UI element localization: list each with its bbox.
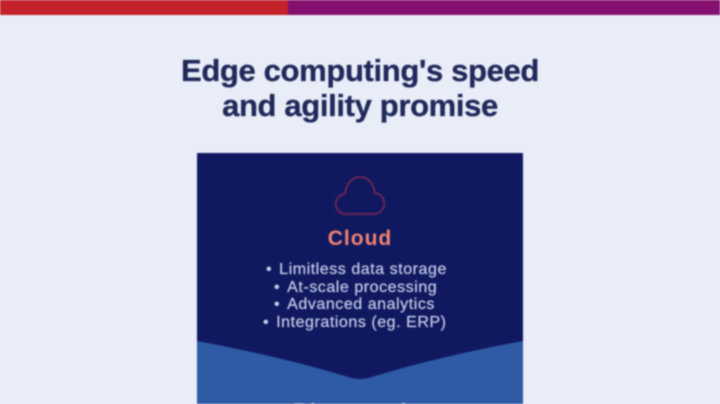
panel: cloud chevron background — [196, 152, 524, 380]
heading: Cloud: Cloud — [328, 227, 392, 250]
title: Edge computing's speed — [181, 53, 539, 88]
list item 1: • Limitless data storage — [266, 261, 447, 278]
top colour band — [0, 0, 720, 15]
red band segment — [0, 0, 288, 15]
title — [181, 53, 539, 124]
list item 2: • At-scale processing — [274, 278, 437, 296]
panel: diagram — [197, 153, 523, 404]
list item 3: • Advanced analytics — [274, 296, 435, 313]
list: cloud capabilities — [262, 261, 447, 332]
icon: cloud — [334, 175, 386, 216]
title: and agility promise — [222, 88, 498, 123]
list item 4: • Integrations (eg. ERP) — [263, 314, 447, 330]
